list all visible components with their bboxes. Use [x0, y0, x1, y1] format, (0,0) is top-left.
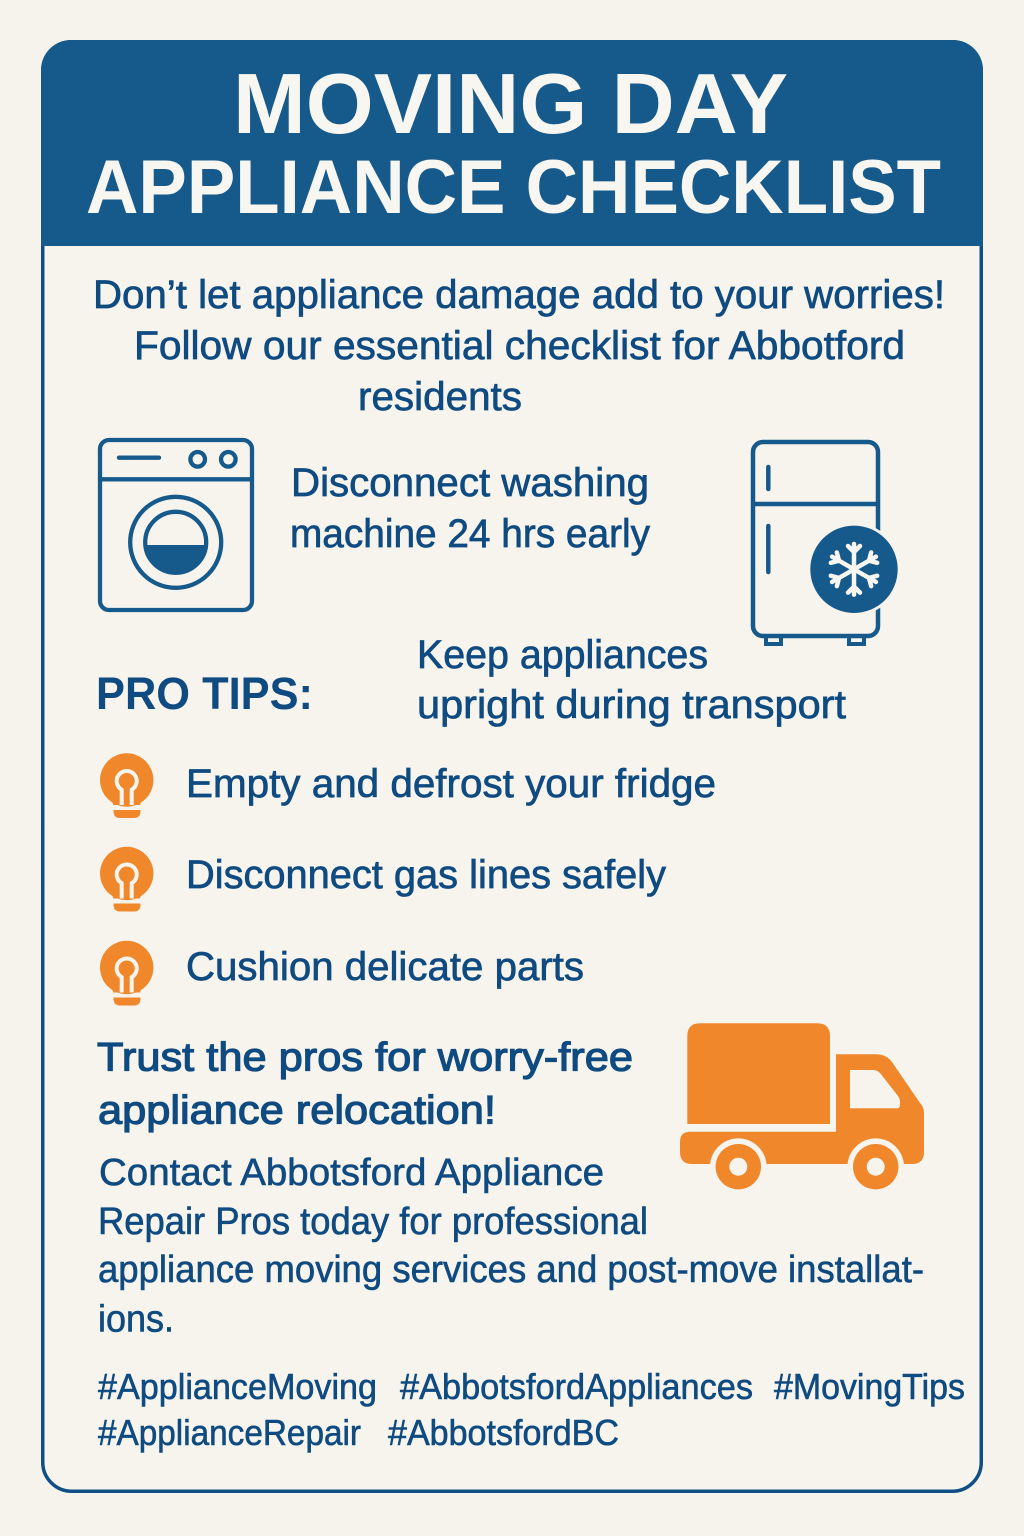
tip 2 text: Disconnect gas lines safely — [186, 853, 666, 897]
washing machine text line 1: Disconnect washing — [291, 461, 649, 505]
hashtag: AbbotsfordAppliances: #AbbotsfordAppliances — [400, 1366, 753, 1407]
contact text line 4: ions. — [98, 1298, 174, 1340]
icon: washing machine — [100, 440, 252, 610]
icon: delivery truck — [680, 1023, 924, 1196]
trust heading line 1: Trust the pros for worry-free — [97, 1036, 633, 1080]
intro line 3: residents — [358, 375, 522, 419]
contact text line 1: Contact Abbotsford Appliance — [99, 1152, 604, 1194]
trust heading line 2: appliance relocation! — [98, 1088, 496, 1132]
title line 2: APPLIANCE CHECKLIST — [86, 145, 941, 230]
icon: bulb 3 — [100, 941, 153, 1006]
hashtag: AbbotsfordBC: #AbbotsfordBC — [388, 1412, 619, 1453]
washing machine text line 2: machine 24 hrs early — [290, 512, 650, 556]
tip 3 text: Cushion delicate parts — [186, 945, 584, 989]
hashtag: ApplianceRepair: #ApplianceRepair — [98, 1412, 361, 1453]
contact text line 2: Repair Pros today for professional — [98, 1201, 648, 1243]
hashtag: MovingTips: #MovingTips — [774, 1366, 965, 1407]
upright text line 2: upright during transport — [417, 683, 846, 727]
title line 1: MOVING DAY — [233, 57, 788, 152]
icon: bulb 1 — [100, 753, 153, 818]
header band — [41, 40, 983, 246]
hashtag: ApplianceMoving: #ApplianceMoving — [98, 1366, 377, 1407]
upright text line 1: Keep appliances — [417, 633, 708, 677]
icon: bulb 2 — [100, 847, 153, 912]
intro line 2: Follow our essential checklist for Abbotford — [134, 324, 905, 368]
icon: fridge with snowflake — [753, 442, 900, 644]
intro line 1: Don’t let appliance damage add to your worries! — [93, 273, 945, 317]
tip 1 text: Empty and defrost your fridge — [186, 762, 716, 806]
contact text line 3: appliance moving services and post-move installat- — [98, 1249, 924, 1291]
pro tips heading: PRO TIPS: — [96, 668, 313, 719]
